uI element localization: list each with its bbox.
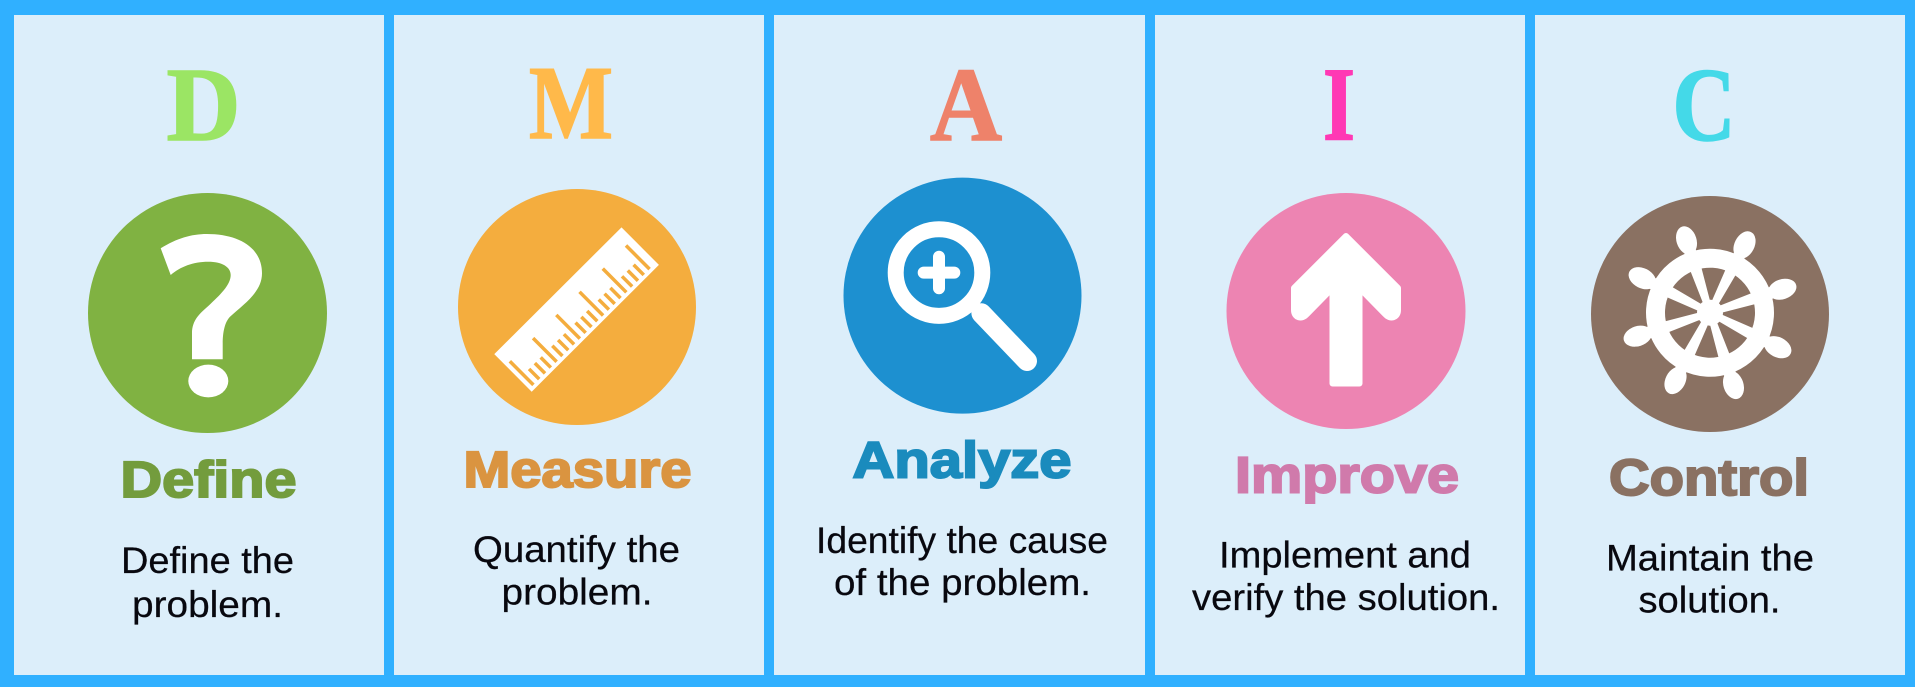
description: Improve — [1192, 534, 1500, 618]
heading: Measure: Measure — [464, 441, 692, 498]
description: Analyze: Identify the cause — [816, 520, 1108, 561]
description: Define: Define the — [121, 540, 294, 581]
icon: up arrow — [1226, 193, 1466, 429]
icon: question mark — [88, 193, 327, 433]
description: Analyze — [816, 520, 1108, 603]
letter M: M — [529, 44, 613, 161]
description: Measure: problem. — [502, 572, 652, 613]
panel: Improve — [1155, 15, 1525, 675]
icon: ruler — [458, 189, 696, 425]
panel: Measure — [394, 15, 764, 675]
letter C: C — [1672, 46, 1736, 163]
description: Define: problem. — [132, 584, 283, 625]
icon: magnifying glass — [844, 178, 1082, 414]
letter I: I — [1323, 46, 1355, 162]
icon: ship wheel — [1591, 196, 1829, 432]
panel: Control — [1535, 15, 1905, 675]
description: Analyze: of the problem. — [834, 562, 1091, 603]
letter D: D — [166, 46, 240, 163]
letter A: A — [930, 46, 1002, 163]
description: Improve: verify the solution. — [1192, 577, 1500, 618]
heading: Improve: Improve — [1235, 447, 1459, 504]
panel: Define — [14, 15, 384, 675]
heading: Analyze: Analyze — [852, 432, 1072, 489]
description: Measure: Quantify the — [473, 529, 680, 570]
description: Control: solution. — [1638, 580, 1780, 621]
description: Improve: Implement and — [1219, 534, 1471, 576]
description: Measure — [473, 529, 680, 613]
heading: Control: Control — [1609, 449, 1809, 506]
description: Define — [121, 540, 294, 625]
panel: Analyze — [774, 15, 1145, 675]
heading: Define: Define — [120, 451, 296, 508]
description: Control — [1606, 538, 1814, 621]
description: Control: Maintain the — [1606, 538, 1814, 578]
